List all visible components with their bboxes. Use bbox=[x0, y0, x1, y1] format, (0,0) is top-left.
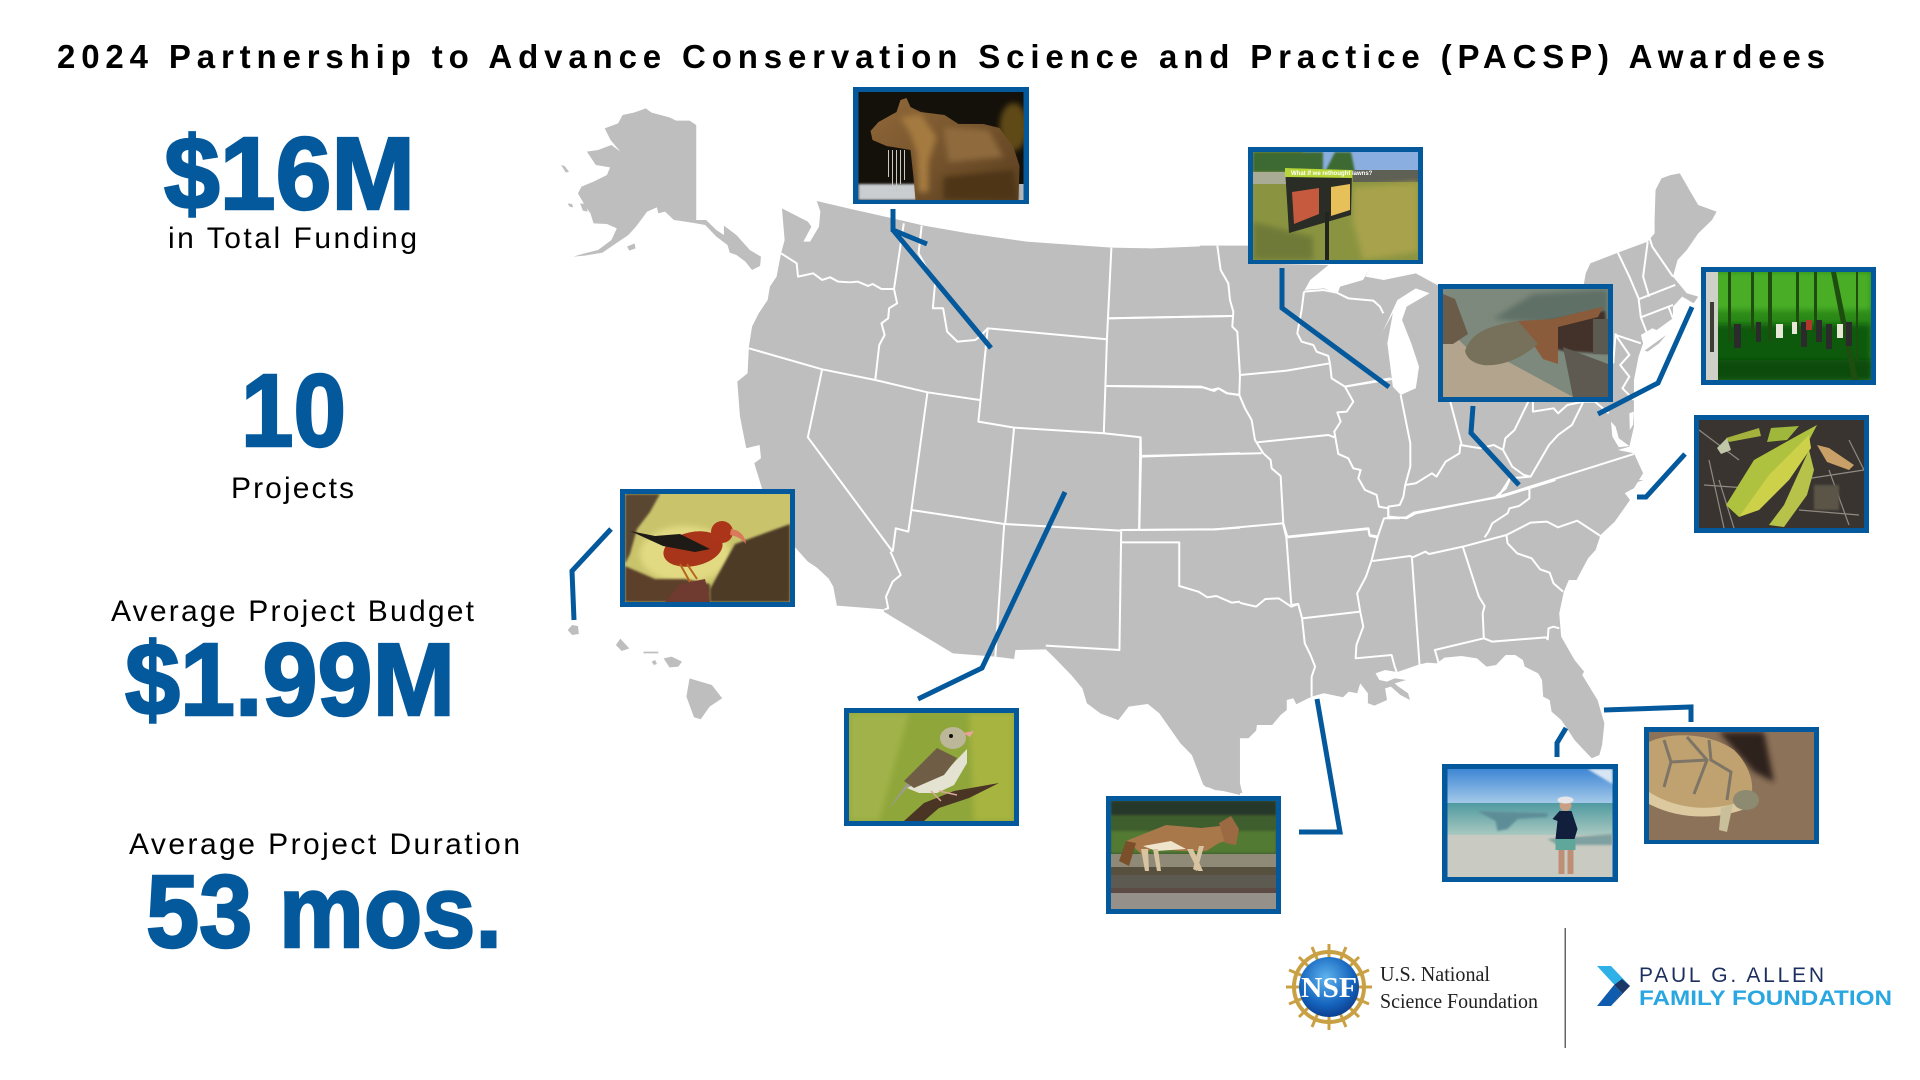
US map bbox=[561, 108, 1717, 795]
connector: tortoise photo to Florida bbox=[1604, 707, 1691, 722]
foundation wordmark: FAMILY FOUNDATION bbox=[1639, 987, 1892, 1010]
title: 2024 Partnership to Advance Conservation Science and Practice (PACSP) Awardees bbox=[57, 38, 1825, 75]
map: southwest region bbox=[761, 480, 1240, 795]
connector: salamander photo to Virginia bbox=[1471, 406, 1519, 485]
photo: group in green forest bbox=[1701, 267, 1876, 385]
NSF wordmark: U.S. National bbox=[1380, 962, 1490, 986]
connector: iiwi photo to Hawaii bbox=[572, 529, 611, 620]
map: Great Lakes and bays bbox=[1383, 288, 1666, 447]
stat: average project budget: Average Project Budget bbox=[111, 595, 475, 628]
connector: manatee photo to Florida bbox=[1557, 728, 1566, 757]
photo: interpretive sign in meadow: What if we rethought lawns? bbox=[1291, 171, 1373, 177]
map: east region bbox=[1200, 173, 1717, 580]
connector: flytrap photo to North Carolina bbox=[1637, 454, 1685, 497]
connector: coyote photo to Louisiana bbox=[1299, 699, 1340, 832]
map: west region bbox=[737, 201, 1240, 580]
stat: average project duration: Average Project Duration bbox=[129, 828, 520, 861]
stat: average project budget: $1.99M bbox=[125, 622, 455, 737]
photo: person photographing manatee bbox=[1442, 764, 1618, 882]
NSF globe bbox=[1299, 957, 1359, 1017]
foundation wordmark bbox=[1639, 964, 1892, 1010]
foundation wordmark: PAUL G. ALLEN bbox=[1639, 964, 1824, 987]
connector: sparrow photo to New Mexico bbox=[918, 492, 1065, 699]
photo: interpretive sign in meadow bbox=[1248, 147, 1423, 264]
photo: hellbender salamander bbox=[1438, 284, 1613, 402]
Paul G. Allen Family Foundation logo bbox=[1597, 964, 1892, 1010]
NSF wordmark bbox=[1380, 962, 1538, 1013]
connector: sign photo to Illinois bbox=[1282, 268, 1389, 387]
stat: projects bbox=[231, 353, 354, 505]
stat: average project duration: 53 mos. bbox=[146, 854, 502, 969]
chevron icon bbox=[1597, 966, 1630, 1006]
stat: projects: Projects bbox=[231, 472, 354, 505]
photo: ploughshare tortoise bbox=[1644, 727, 1819, 844]
photo: iiwi bird bbox=[620, 489, 795, 607]
photo: coyote bbox=[1106, 796, 1281, 914]
NSF wordmark: Science Foundation bbox=[1380, 989, 1538, 1013]
connector: bear photo to Wyoming bbox=[893, 209, 991, 348]
NSF logo: NSF bbox=[1301, 973, 1357, 1004]
map: state borders bbox=[749, 223, 1675, 697]
NSF logo bbox=[1286, 944, 1538, 1030]
NSF gold ring bbox=[1286, 944, 1372, 1030]
map: south region bbox=[1100, 480, 1643, 793]
stat: projects: 10 bbox=[241, 353, 346, 468]
logo divider bbox=[1564, 928, 1566, 1048]
stat: total funding: $16M bbox=[164, 116, 415, 231]
photo: Venus flytrap bbox=[1694, 415, 1869, 533]
map: Hawaii islands bbox=[568, 625, 722, 719]
map: Alaska bbox=[561, 108, 761, 270]
map: Long Island bbox=[1645, 335, 1666, 352]
connector: forest photo to Maryland bbox=[1598, 307, 1692, 414]
stat: total funding: in Total Funding bbox=[168, 222, 417, 255]
photo: grasshopper sparrow bbox=[844, 708, 1019, 826]
photo: grizzly bear bbox=[853, 87, 1029, 204]
